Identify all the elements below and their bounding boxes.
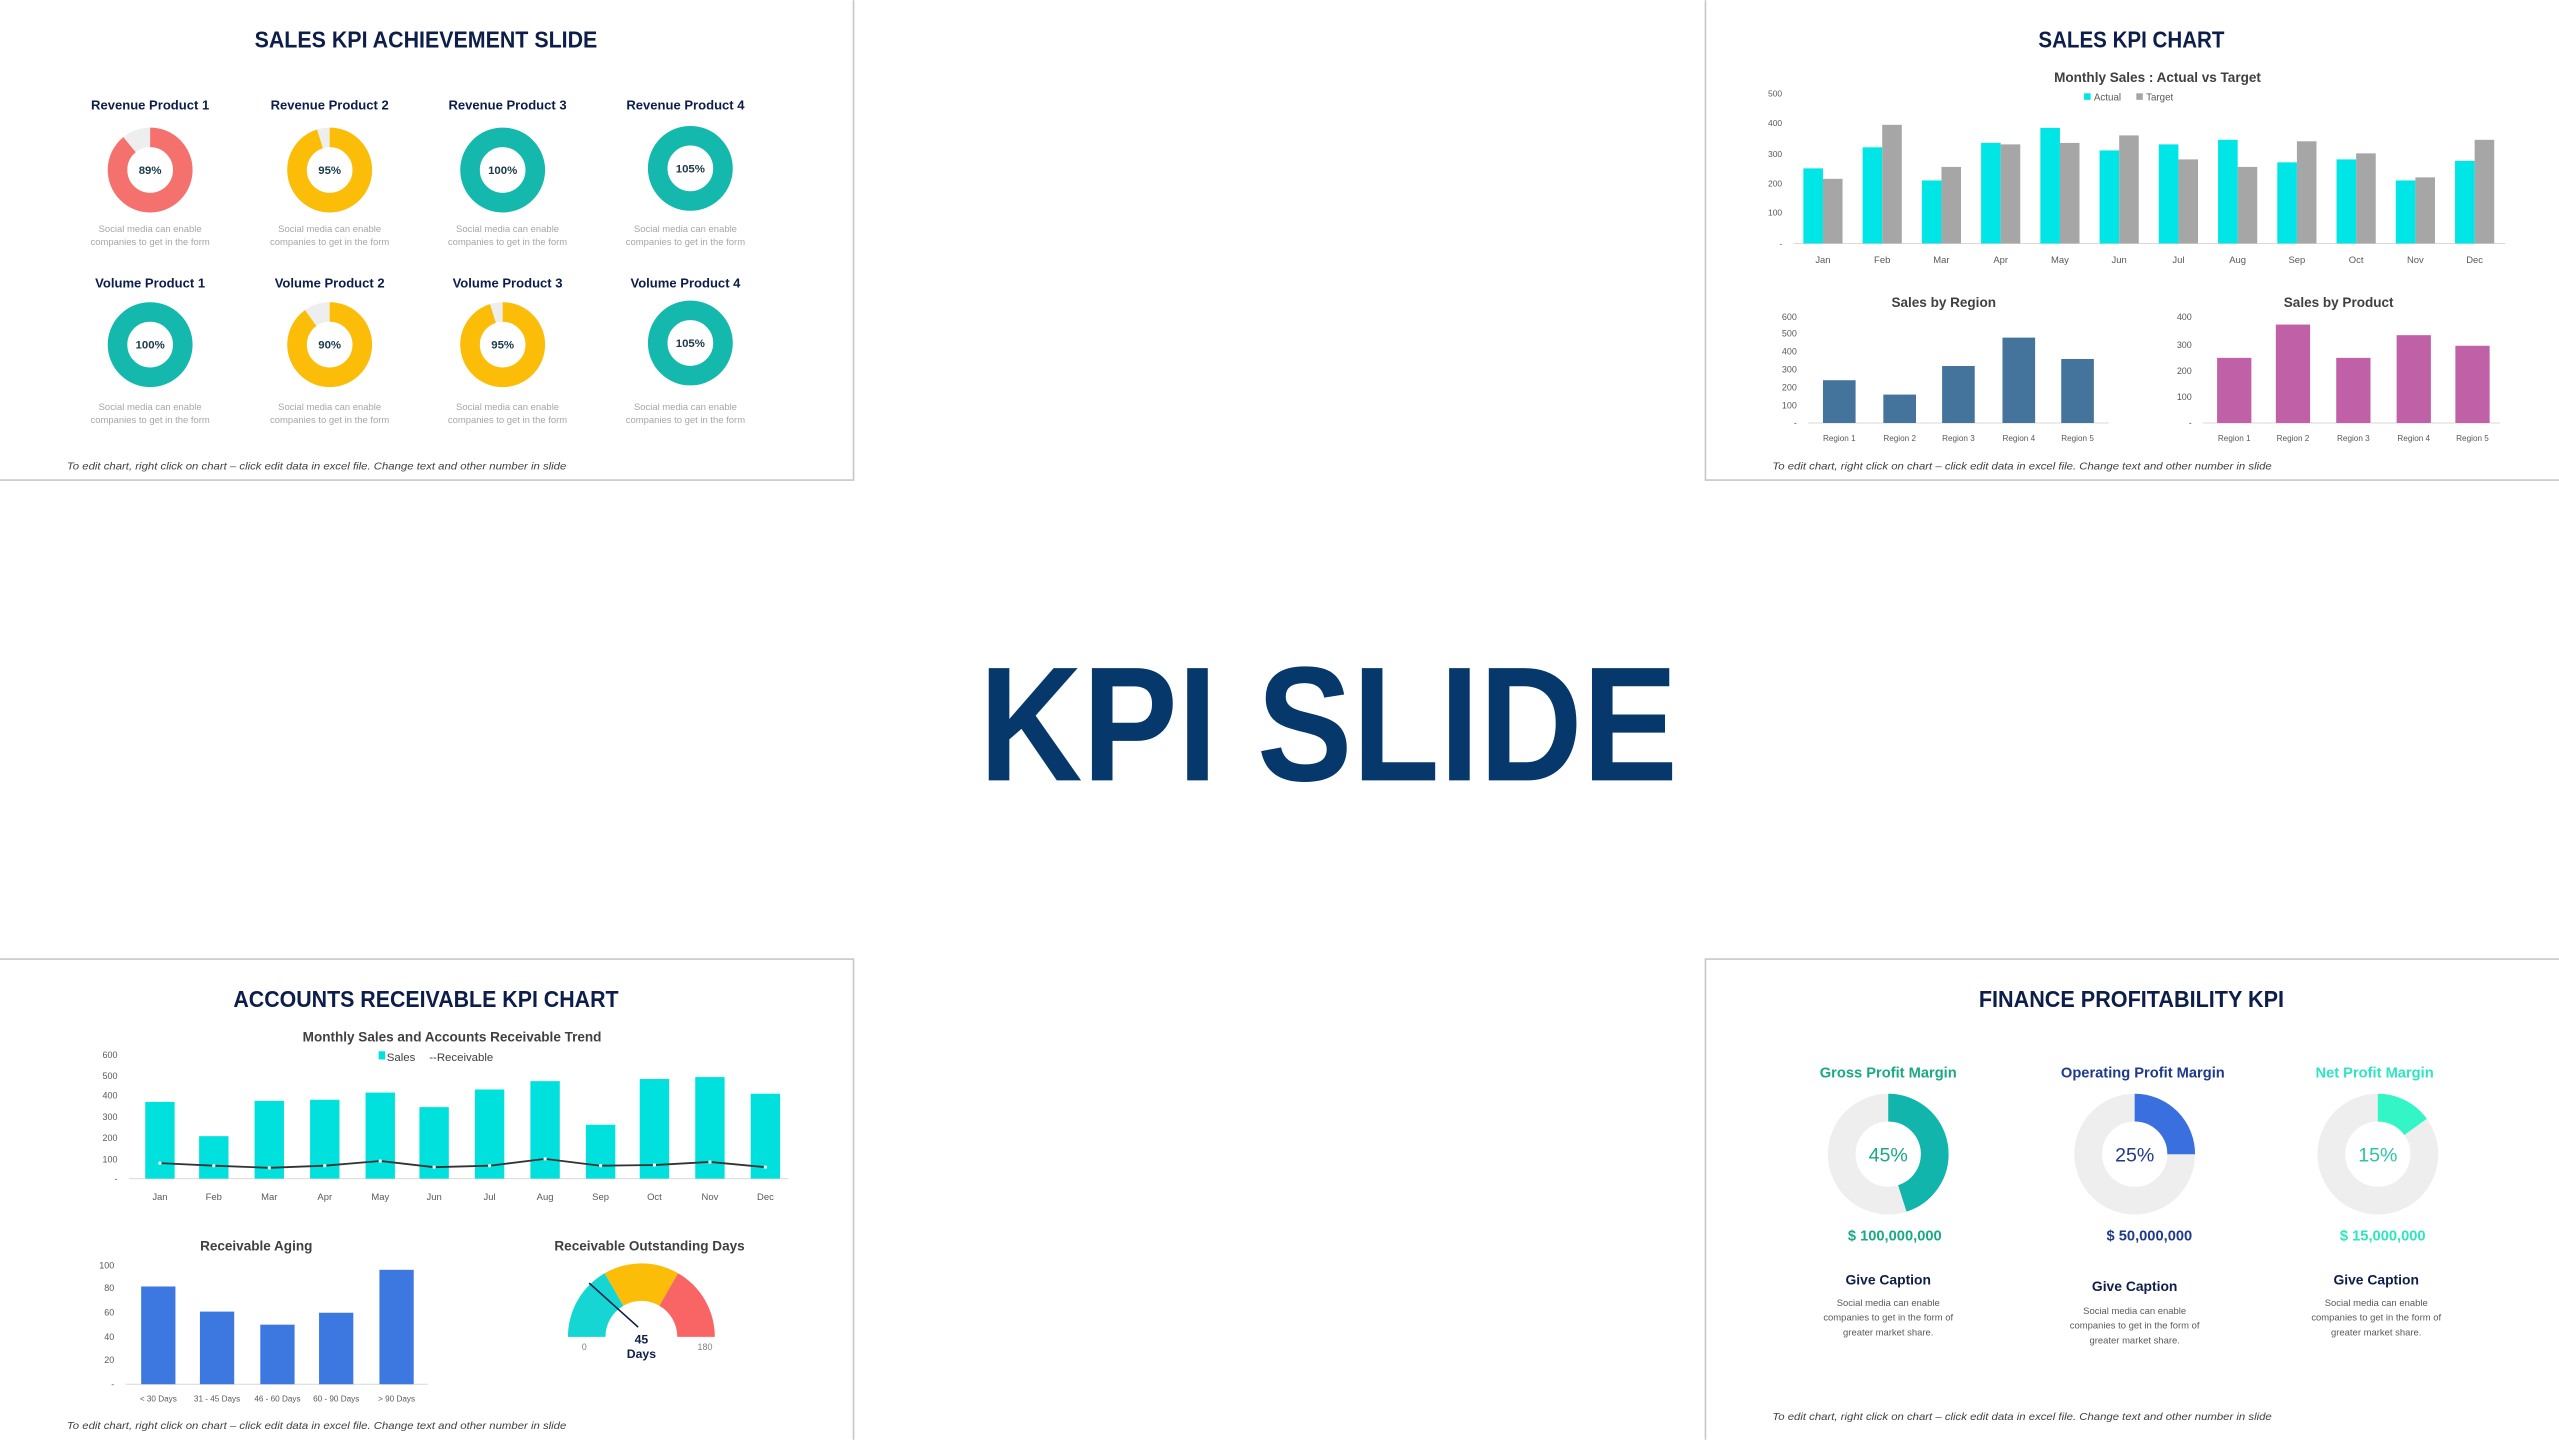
chart: monthly sales and receivable trend: 500 (103, 1071, 118, 1081)
chart: sales by region: - (1794, 418, 1797, 428)
footnote: To edit chart, right click on chart – click edit data in excel file. Change text and other number in slide (1772, 1412, 2272, 1423)
donut: volume product 1: companies to get in the form (91, 415, 210, 426)
chart: monthly sales actual vs target: Nov (2407, 255, 2424, 266)
chart: monthly sales actual vs target: 300 (1768, 149, 1782, 159)
chart: receivable aging: > 90 Days (378, 1394, 415, 1403)
donut: revenue product 1: Social media can enable (99, 224, 202, 235)
chart: monthly sales actual vs target: Mar (1933, 255, 1950, 266)
kpi: net profit margin: $ 15,000,000 (2340, 1229, 2426, 1245)
chart: receivable aging: 60 (104, 1308, 114, 1318)
donut: volume product 3: companies to get in the form (448, 415, 567, 426)
chart: receivable aging: Receivable Aging (200, 1238, 312, 1253)
donut: revenue product 1: companies to get in the form (91, 237, 210, 248)
donut: volume product 2 (270, 276, 389, 426)
kpi: gross profit margin: Give Caption (1845, 1272, 1931, 1288)
chart: monthly sales and receivable trend: 600 (103, 1050, 118, 1060)
donut: volume product 3: 95% (491, 340, 514, 352)
kpi: net profit margin: 15% (2358, 1144, 2397, 1166)
donut: revenue product 2: Social media can enable (278, 224, 381, 235)
kpi: operating profit margin: $ 50,000,000 (2107, 1229, 2192, 1245)
chart: monthly sales and receivable trend: 300 (103, 1112, 118, 1122)
donut: volume product 4 (626, 276, 745, 426)
donut: revenue product 4: companies to get in the form (626, 237, 745, 248)
kpi: gross profit margin: companies to get in the form of (1823, 1313, 1954, 1324)
chart: monthly sales and receivable trend (103, 1030, 788, 1203)
chart: monthly sales actual vs target: Apr (1993, 255, 2008, 266)
kpi: net profit margin: companies to get in the form of (2311, 1313, 2441, 1324)
donut: revenue product 1 (91, 98, 210, 248)
main title: KPI SLIDE (979, 632, 1678, 815)
donut: revenue product 4 (626, 98, 745, 248)
chart: receivable outstanding days gauge (554, 1238, 745, 1361)
donut: volume product 3 (448, 276, 567, 426)
chart: sales by product: Region 5 (2456, 434, 2489, 443)
donut: revenue product 3: companies to get in the form (448, 237, 567, 248)
donut: revenue product 2: Revenue Product 2 (271, 98, 389, 113)
donut: volume product 2: Social media can enable (278, 402, 381, 413)
chart: receivable aging (99, 1238, 428, 1403)
chart: monthly sales actual vs target: Oct (2349, 255, 2364, 266)
chart: sales by region: 500 (1782, 328, 1797, 338)
chart: monthly sales and receivable trend: Monthly Sales and Accounts Receivable Trend (303, 1030, 601, 1045)
chart: monthly sales and receivable trend: 200 (103, 1133, 118, 1143)
chart: monthly sales actual vs target: 400 (1768, 118, 1782, 128)
donut: volume product 1: Volume Product 1 (95, 276, 205, 291)
kpi: operating profit margin: companies to get in the form of (2070, 1321, 2200, 1332)
chart: sales by product: Region 1 (2218, 434, 2251, 443)
donut: volume product 1: 100% (136, 340, 165, 352)
heading: sales kpi achievement: SALES KPI ACHIEVEMENT SLIDE (255, 27, 597, 53)
kpi: operating profit margin: 25% (2115, 1144, 2154, 1166)
donut: volume product 3: Social media can enable (456, 402, 559, 413)
heading: finance profitability: FINANCE PROFITABILITY KPI (1979, 986, 2284, 1012)
chart: receivable aging: 31 - 45 Days (194, 1394, 240, 1403)
donut: revenue product 3: Revenue Product 3 (448, 98, 567, 113)
donut: revenue product 4: 105% (676, 163, 705, 175)
chart: receivable outstanding days gauge: 45 (635, 1332, 648, 1346)
chart: monthly sales actual vs target: Jun (2112, 255, 2127, 266)
chart: sales by region: Region 4 (2002, 434, 2036, 443)
kpi: gross profit margin (1820, 1065, 1957, 1338)
chart: sales by product: Region 3 (2337, 434, 2370, 443)
chart: monthly sales and receivable trend: - (115, 1174, 118, 1184)
chart: monthly sales and receivable trend: Dec (757, 1192, 774, 1203)
donut: revenue product 4: Revenue Product 4 (626, 98, 745, 113)
chart: monthly sales and receivable trend: Aug (537, 1192, 554, 1203)
chart: monthly sales and receivable trend: Apr (317, 1192, 332, 1203)
chart: sales by region: 200 (1782, 382, 1797, 392)
chart: sales by product: Region 2 (2277, 434, 2310, 443)
chart: sales by product: 200 (2177, 366, 2192, 376)
chart: monthly sales actual vs target: Jan (1815, 255, 1831, 266)
chart: receivable aging: 46 - 60 Days (254, 1394, 301, 1403)
kpi: net profit margin: Give Caption (2333, 1272, 2419, 1288)
chart: sales by product: Region 4 (2397, 434, 2431, 443)
heading: accounts receivable: ACCOUNTS RECEIVABLE KPI CHART (233, 986, 619, 1012)
chart: monthly sales and receivable trend: Sep (592, 1192, 609, 1203)
donut: volume product 4: Volume Product 4 (630, 276, 741, 291)
kpi: gross profit margin: $ 100,000,000 (1848, 1229, 1942, 1245)
donut: volume product 2: companies to get in the form (270, 415, 389, 426)
chart: receivable aging: 60 - 90 Days (313, 1394, 359, 1403)
chart: receivable aging: 20 (104, 1355, 114, 1365)
chart: sales by region: Region 5 (2061, 434, 2094, 443)
chart: receivable outstanding days gauge: 180 (698, 1342, 713, 1352)
chart: sales by region: 400 (1782, 346, 1797, 356)
kpi: operating profit margin: Operating Profit Margin (2061, 1065, 2225, 1081)
chart: monthly sales actual vs target (1768, 70, 2505, 266)
panel: finance profitability (1772, 986, 2441, 1423)
panel: sales kpi chart (1768, 27, 2505, 472)
chart: receivable outstanding days gauge: Receivable Outstanding Days (554, 1238, 745, 1253)
chart: monthly sales actual vs target: 500 (1768, 89, 1782, 99)
kpi: gross profit margin: Gross Profit Margin (1820, 1065, 1957, 1081)
chart: sales by product: 400 (2177, 312, 2192, 322)
donut: revenue product 3 (448, 98, 567, 248)
chart: monthly sales and receivable trend: Jul (484, 1192, 496, 1203)
chart: monthly sales actual vs target: 200 (1768, 178, 1782, 188)
kpi: gross profit margin: 45% (1869, 1144, 1908, 1166)
chart: monthly sales actual vs target: Target (2146, 93, 2174, 104)
donut: revenue product 2: companies to get in the form (270, 237, 389, 248)
donut: volume product 3: Volume Product 3 (453, 276, 563, 291)
donut: volume product 2: 90% (318, 340, 341, 352)
donut: volume product 1 (91, 276, 210, 426)
footnote: To edit chart, right click on chart – click edit data in excel file. Change text and other number in slide (1772, 461, 2272, 472)
kpi: gross profit margin: Social media can enable (1837, 1298, 1940, 1309)
heading: sales kpi chart: SALES KPI CHART (2038, 27, 2224, 53)
chart: sales by region (1782, 295, 2109, 443)
chart: monthly sales and receivable trend: 400 (103, 1091, 118, 1101)
chart: receivable aging: - (111, 1379, 114, 1389)
chart: sales by product (2177, 295, 2500, 443)
donut: revenue product 3: Social media can enable (456, 224, 559, 235)
chart: monthly sales actual vs target: Monthly Sales : Actual vs Target (2054, 70, 2261, 85)
chart: monthly sales actual vs target: Actual (2094, 93, 2121, 104)
chart: receivable aging: < 30 Days (140, 1394, 177, 1403)
chart: monthly sales and receivable trend: --Receivable (429, 1052, 493, 1064)
chart: sales by product: 300 (2177, 340, 2192, 350)
kpi: operating profit margin: Give Caption (2092, 1278, 2177, 1294)
chart: monthly sales and receivable trend: 100 (103, 1154, 118, 1164)
chart: sales by region: Region 2 (1883, 434, 1916, 443)
donut: revenue product 4: Social media can enable (634, 224, 737, 235)
chart: sales by region: Region 3 (1942, 434, 1975, 443)
chart: sales by product: - (2189, 418, 2192, 428)
chart: monthly sales and receivable trend: Feb (206, 1192, 222, 1203)
donut: revenue product 2: 95% (318, 165, 341, 177)
chart: receivable outstanding days gauge: Days (627, 1347, 656, 1361)
kpi: operating profit margin: Social media can enable (2083, 1306, 2186, 1317)
chart: sales by region: 300 (1782, 364, 1797, 374)
donut: volume product 4: Social media can enable (634, 402, 737, 413)
chart: monthly sales actual vs target: Dec (2466, 255, 2483, 266)
footnote: To edit chart, right click on chart – click edit data in excel file. Change text and other number in slide (67, 461, 567, 472)
chart: monthly sales actual vs target: Aug (2229, 255, 2246, 266)
chart: monthly sales and receivable trend: May (371, 1192, 389, 1203)
chart: monthly sales actual vs target: 100 (1768, 208, 1782, 218)
chart: monthly sales and receivable trend: Jan (152, 1192, 168, 1203)
chart: receivable aging: 80 (104, 1283, 114, 1293)
donut: volume product 4: companies to get in the form (626, 415, 745, 426)
kpi: net profit margin: Net Profit Margin (2315, 1065, 2434, 1081)
donut: volume product 2: Volume Product 2 (275, 276, 385, 291)
kpi: net profit margin: greater market share. (2331, 1327, 2421, 1338)
chart: monthly sales actual vs target: - (1779, 239, 1782, 249)
chart: receivable aging: 100 (99, 1260, 114, 1270)
chart: monthly sales actual vs target: Sep (2288, 255, 2305, 266)
footnote: To edit chart, right click on chart – click edit data in excel file. Change text and other number in slide (67, 1421, 567, 1432)
donut: revenue product 1: Revenue Product 1 (91, 98, 209, 113)
panel: accounts receivable (67, 986, 788, 1432)
donut: volume product 4: 105% (676, 338, 705, 350)
chart: receivable aging: 40 (104, 1332, 114, 1342)
kpi: operating profit margin: greater market share. (2089, 1335, 2180, 1346)
chart: sales by region: 600 (1782, 312, 1797, 322)
kpi: net profit margin: Social media can enable (2325, 1298, 2428, 1309)
donut: revenue product 3: 100% (488, 165, 517, 177)
chart: monthly sales and receivable trend: Nov (702, 1192, 719, 1203)
donut: revenue product 1: 89% (139, 165, 162, 177)
donut: volume product 1: Social media can enable (99, 402, 202, 413)
chart: monthly sales and receivable trend: Mar (261, 1192, 277, 1203)
kpi: operating profit margin (2061, 1065, 2225, 1346)
panel: sales kpi achievement (67, 27, 745, 472)
chart: sales by product: 100 (2177, 392, 2192, 402)
chart: monthly sales actual vs target: Feb (1874, 255, 1890, 266)
kpi: gross profit margin: greater market share. (1843, 1327, 1933, 1338)
chart: monthly sales actual vs target: May (2051, 255, 2069, 266)
chart: sales by region: Region 1 (1823, 434, 1856, 443)
kpi: net profit margin (2311, 1065, 2441, 1338)
chart: monthly sales and receivable trend: Jun (426, 1192, 442, 1203)
chart: monthly sales and receivable trend: Sales (387, 1052, 416, 1064)
chart: receivable outstanding days gauge: 0 (582, 1342, 587, 1352)
chart: sales by region: 100 (1782, 400, 1797, 410)
donut: revenue product 2 (270, 98, 389, 248)
chart: sales by product: Sales by Product (2284, 295, 2394, 310)
chart: monthly sales actual vs target: Jul (2172, 255, 2184, 266)
chart: sales by region: Sales by Region (1891, 295, 1996, 310)
chart: monthly sales and receivable trend: Oct (647, 1192, 662, 1203)
